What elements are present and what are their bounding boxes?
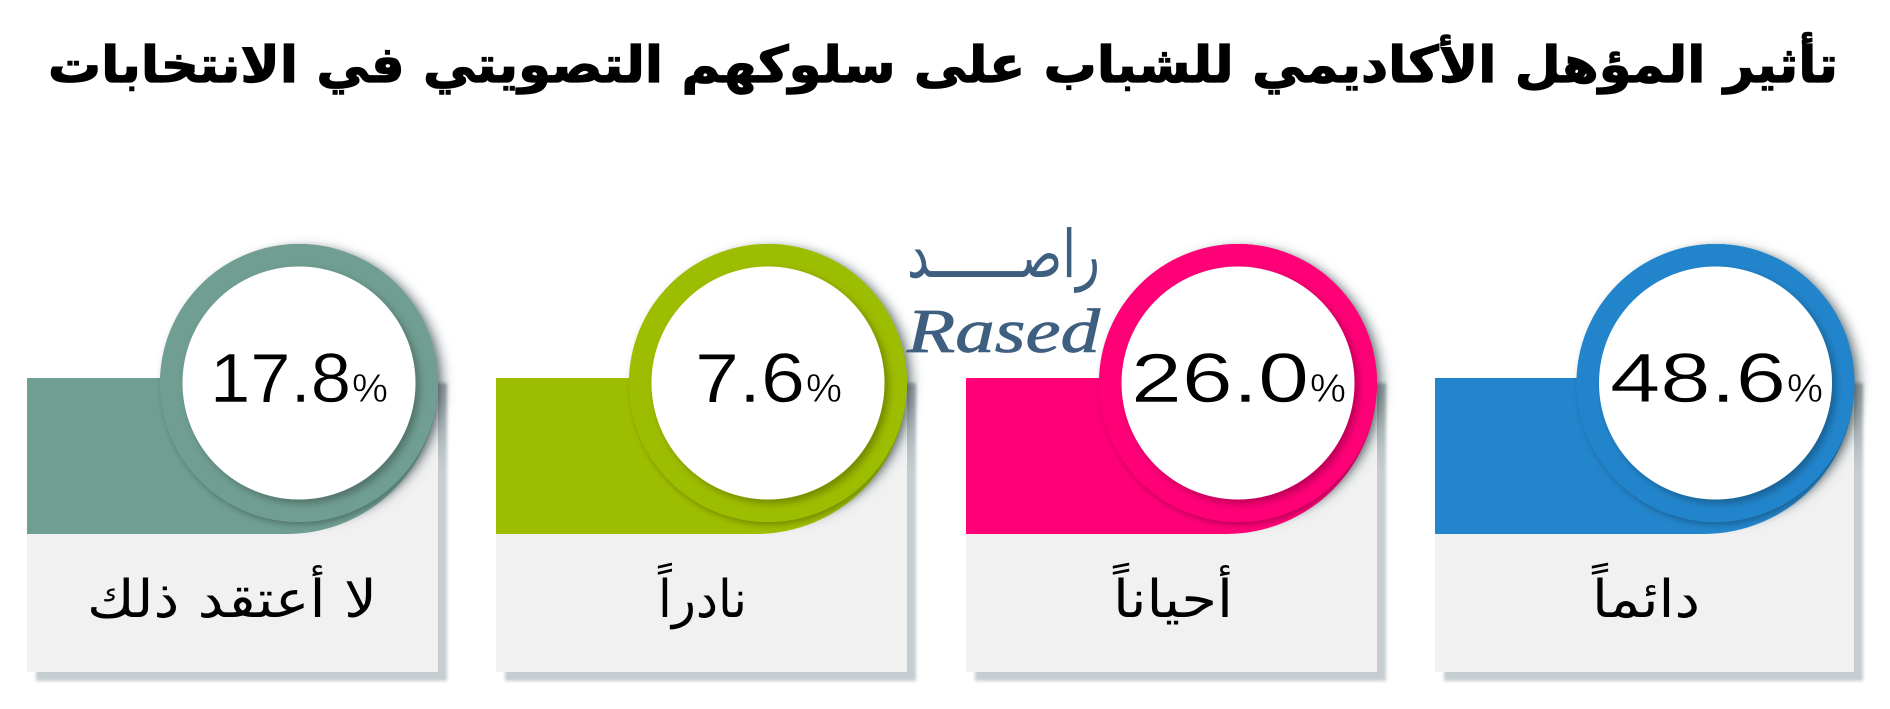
white disc [182,266,416,500]
ring soft shadow [1584,246,1862,524]
logo Latin wordmark: Rased [906,298,1101,366]
label: أحياناً [1112,563,1233,630]
card: 17.8% [27,244,447,681]
value: % [806,367,842,411]
card shadow [975,383,1386,681]
value: 17.8 [210,339,351,417]
white disc [1122,266,1354,500]
ring [1099,244,1377,522]
ring [629,244,907,522]
label: دائماً [1591,563,1700,630]
ring soft shadow [1106,246,1384,524]
value: % [1787,367,1823,411]
title: تأثير المؤهل الأكاديمي للشباب على سلوكهم التصويتي في الانتخابات [48,32,1838,95]
value: 7.6 [695,339,805,417]
card: 48.6% [1435,244,1863,681]
label: نادراً [657,563,747,630]
coloured header [496,244,907,534]
card shadow [505,383,916,681]
label: لا أعتقد ذلك [87,565,377,630]
white disc [1599,266,1832,500]
coloured header [27,244,438,534]
value [1131,339,1346,417]
value: 48.6 [1610,339,1786,417]
card: 26.0% [966,244,1386,681]
label panel [496,383,907,672]
logo Arabic wordmark: راصــــــد [907,216,1100,293]
ring [160,244,438,522]
coloured header [1435,244,1854,534]
label panel [27,383,438,672]
coloured header [966,244,1377,534]
card: 7.6% [496,244,916,681]
card shadow [36,383,447,681]
ring soft shadow [167,246,445,524]
value [695,339,842,417]
card shadow [1444,383,1863,681]
ring [1576,244,1854,522]
logo: Rased [906,216,1101,366]
value [1610,339,1823,417]
label panel [966,383,1377,672]
white disc [652,266,884,500]
value: % [352,367,388,411]
value: % [1310,367,1346,411]
value: 26.0 [1131,339,1309,417]
ring soft shadow [636,246,914,524]
label panel [1435,383,1854,672]
